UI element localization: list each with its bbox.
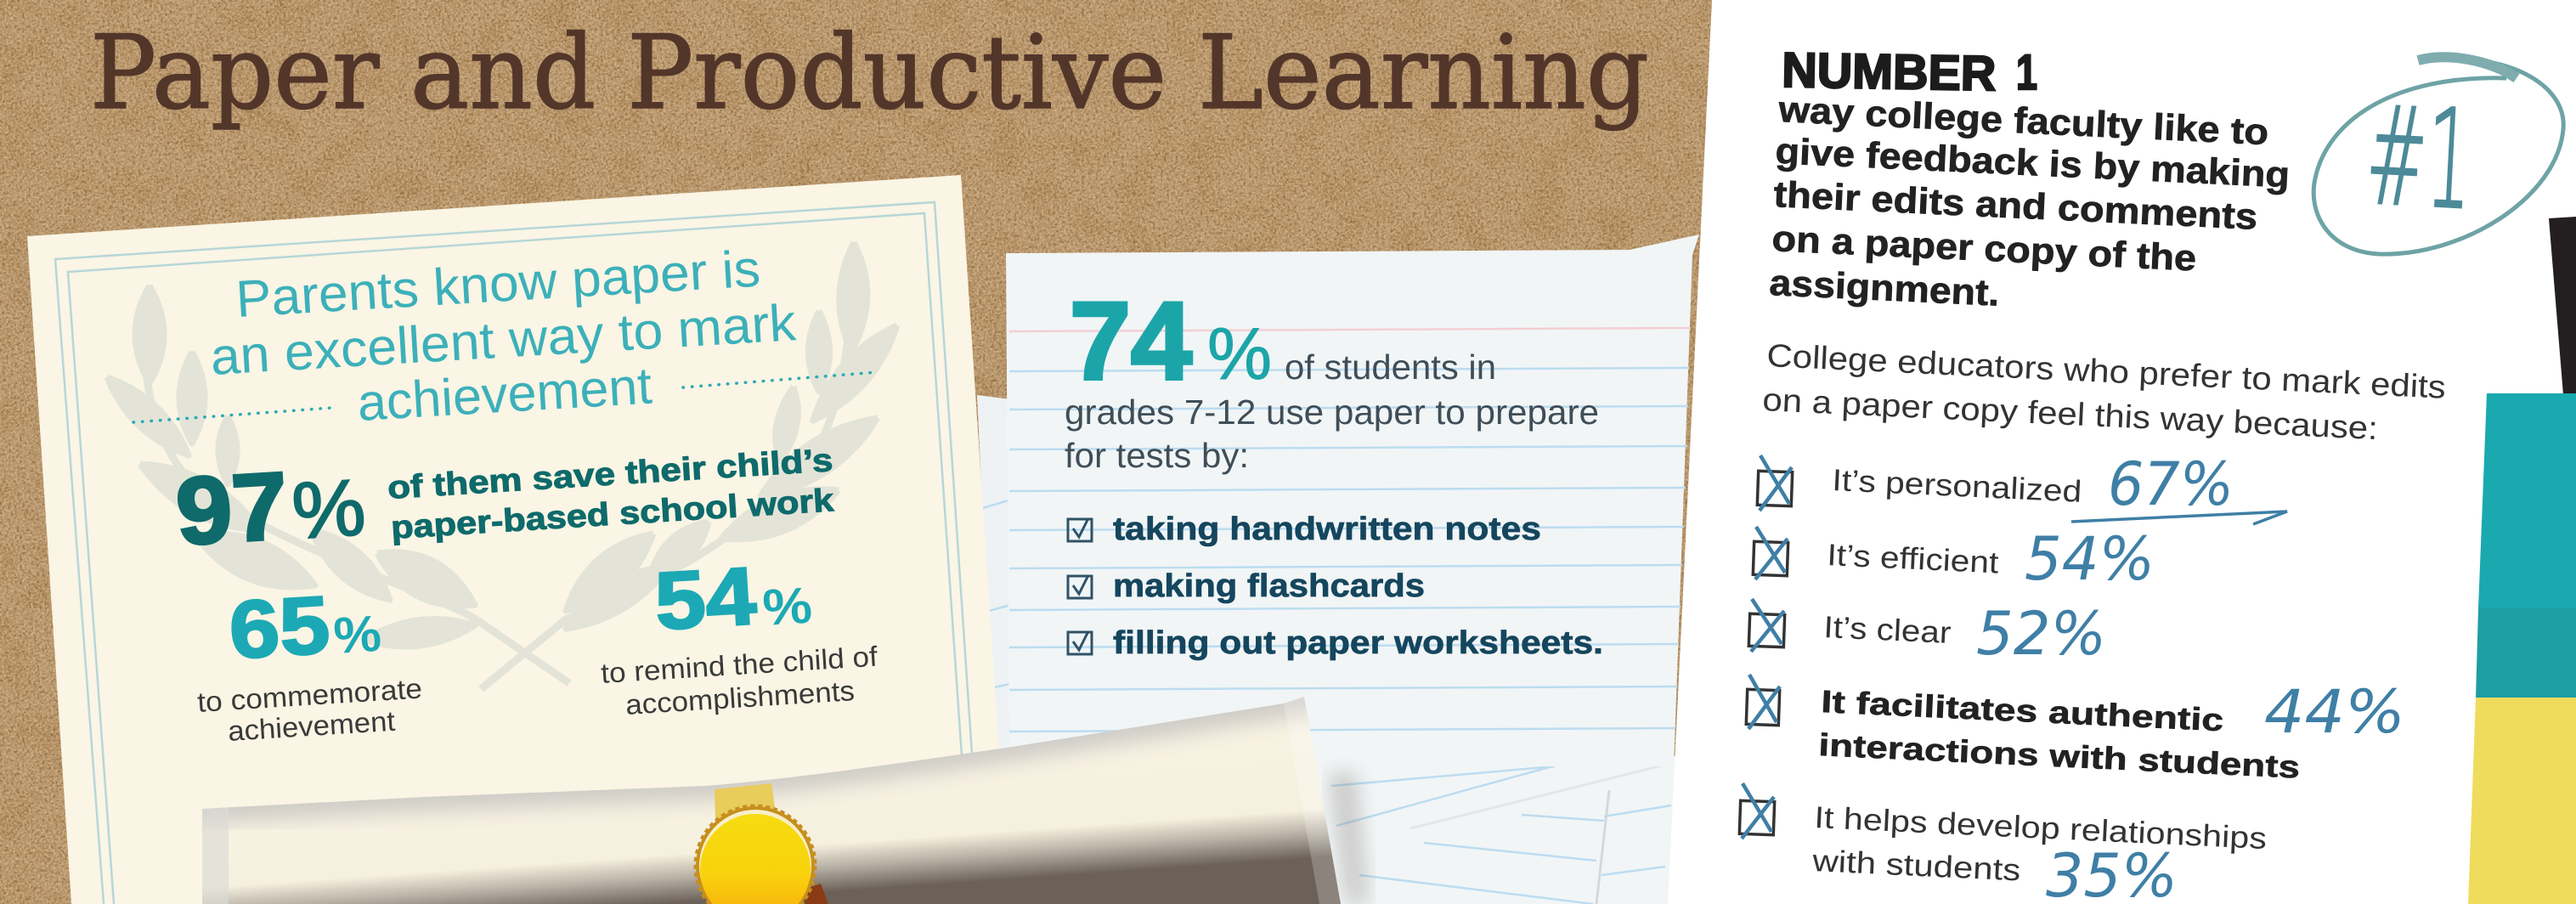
reason: develop relationships	[1739, 783, 2268, 904]
faculty feedback statement: give feedback is by making	[1775, 131, 2291, 196]
reason: clear	[1748, 599, 2106, 669]
pink margin rule	[1009, 328, 1691, 331]
54 percent description	[600, 641, 879, 720]
educators intro	[1762, 338, 2447, 447]
certificate double border	[55, 202, 982, 904]
panel: white faculty feedback page	[1668, 0, 2576, 904]
reason: efficient	[1753, 524, 2155, 594]
heading: number 1: NUMBER	[1782, 42, 1997, 101]
title: Paper and Productive Learning	[90, 14, 1649, 133]
faculty feedback statement: way college faculty like to	[1777, 89, 2269, 153]
reason: develop relationships: with students	[1811, 843, 2021, 888]
97 percent description	[387, 443, 836, 546]
stat: 97 percent	[173, 452, 368, 565]
reason: efficient: It’s efficient	[1827, 537, 1999, 580]
certificate heading: achievement	[356, 357, 653, 432]
certificate heading	[209, 239, 798, 432]
yellow book	[2468, 698, 2576, 904]
65 percent description	[196, 672, 423, 747]
97 percent description: paper-based school work	[390, 483, 836, 546]
dotted rule right	[683, 372, 878, 387]
scroll body	[170, 686, 1359, 904]
black book edge	[2549, 217, 2576, 395]
reason: efficient: 54%	[2025, 524, 2155, 594]
stat: 97 percent: %	[290, 462, 368, 556]
panel: achievement certificate	[27, 175, 1009, 904]
faculty feedback statement: assignment.	[1769, 263, 2000, 314]
certificate heading: Parents know paper is	[234, 239, 762, 328]
checklist: taking handwritten notes: taking handwritten notes	[1113, 511, 1541, 547]
circled number one mark: #1	[2363, 76, 2477, 240]
students description	[1065, 347, 1599, 475]
checklist: making flashcards: making flashcards	[1113, 568, 1425, 604]
reason: authentic interactions: 44%	[2264, 677, 2405, 747]
stat: 65 percent	[227, 579, 383, 676]
reason: personalized: 67%	[2108, 449, 2234, 519]
page sheet	[1668, 0, 2576, 904]
teal book lower band	[2476, 608, 2576, 698]
reason: clear: 52%	[1976, 599, 2106, 669]
teal book	[2478, 393, 2576, 608]
dotted rule left	[133, 408, 331, 422]
ribbon	[715, 783, 777, 820]
educators intro: on a paper copy feel this way because:	[1762, 382, 2379, 447]
panel: notebook page with test preparation stats	[1006, 234, 1699, 766]
stat: 74 percent: 74	[1070, 279, 1192, 403]
students description: for tests by:	[1065, 436, 1249, 475]
blue ruled lines	[1009, 368, 1689, 732]
circled number one mark	[2313, 57, 2563, 254]
54 percent description: to remind the child of	[600, 641, 879, 689]
reason: develop relationships: It helps develop relationships	[1814, 799, 2268, 856]
certificate sheet	[27, 175, 1009, 904]
ribbon tail	[804, 884, 828, 904]
54 percent description: accomplishments	[624, 675, 856, 720]
educators intro: College educators who prefer to mark edits	[1766, 338, 2447, 406]
97 percent description: of them save their child’s	[387, 443, 834, 506]
students description: of students in	[1285, 347, 1496, 387]
checklist: filling out paper worksheets: filling out paper worksheets.	[1113, 625, 1603, 661]
faculty feedback statement: on a paper copy of the	[1771, 218, 2197, 280]
65 percent description: achievement	[227, 705, 396, 747]
scroll cast shadow	[1330, 773, 1368, 904]
certificate heading: an excellent way to mark	[209, 293, 798, 386]
reason: authentic interactions: It facilitates authentic	[1821, 684, 2224, 737]
gold seal	[696, 806, 815, 904]
stat: 74 percent: %	[1207, 314, 1272, 395]
stat: 54 percent	[652, 551, 814, 647]
scroll right end cap	[1284, 697, 1341, 904]
stat: 65 percent: %	[332, 605, 383, 664]
reason: authentic interactions	[1746, 675, 2405, 785]
notebook sheet	[1006, 234, 1699, 766]
stat: 65 percent: 65	[227, 579, 332, 676]
stat: 54 percent: %	[761, 577, 814, 636]
scroll left end	[202, 825, 229, 904]
stat: 97 percent: 97	[173, 452, 291, 565]
faculty feedback statement	[1769, 89, 2291, 314]
laurel wreath	[107, 242, 897, 689]
heading: number 1: 1	[2016, 45, 2037, 100]
65 percent description: to commemorate	[196, 672, 423, 718]
reason: authentic interactions: interactions with students	[1818, 727, 2301, 785]
reason: personalized	[1757, 449, 2287, 524]
faculty feedback statement: their edits and comments	[1773, 174, 2258, 238]
diploma scroll	[170, 686, 1368, 904]
stat: 74 percent	[1070, 279, 1272, 403]
students description: grades 7-12 use paper to prepare	[1065, 393, 1599, 432]
reason: personalized: It’s personalized	[1832, 462, 2082, 509]
stat: 54 percent: 54	[652, 551, 759, 647]
panel: loose paper sheets behind notebook page	[977, 395, 1699, 904]
reason: clear: It’s clear	[1823, 609, 1952, 650]
